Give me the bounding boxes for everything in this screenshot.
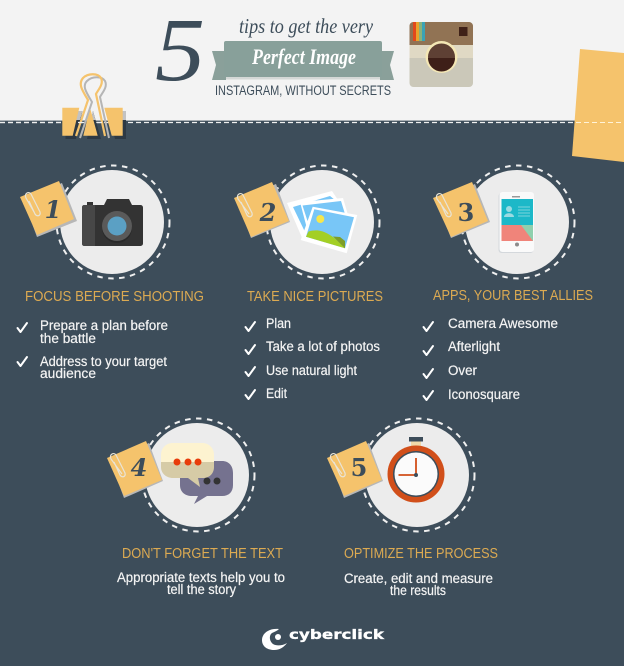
checklist: the battle: [40, 331, 96, 346]
sticky note number 1: 1: [45, 195, 61, 224]
checklist: Camera Awesome: [448, 316, 558, 331]
checklist: Edit: [266, 386, 287, 401]
sticky note number 3: [433, 182, 490, 238]
panel: tip 4: [107, 418, 285, 597]
icon: camera: [82, 199, 143, 246]
ribbon banner: Perfect Image: [251, 44, 356, 69]
icon: photos: [287, 191, 357, 253]
icon: chat bubbles: [161, 443, 233, 504]
title numeral 5: 5: [155, 1, 205, 100]
heading: TAKE NICE PICTURES: [247, 288, 383, 305]
sticky note number 2: 2: [259, 198, 276, 227]
icon circle: [56, 166, 170, 278]
panel: tip 5: [327, 418, 498, 598]
sticky note number 5: 5: [351, 453, 367, 482]
sticky note top right: [572, 49, 624, 162]
description: Appropriate texts help you to: [117, 570, 285, 585]
icon: stopwatch: [388, 437, 444, 502]
checklist: Over: [448, 363, 477, 378]
logo: cyberclick: cyberclick: [289, 628, 384, 643]
checklist: Use natural light: [266, 363, 357, 378]
subtitle: INSTAGRAM, WITHOUT SECRETS: [215, 83, 391, 98]
icon circle: [142, 418, 254, 532]
checklist: Address to your target: [40, 354, 167, 369]
description: the results: [390, 583, 446, 598]
sticky note number 5: [327, 441, 383, 498]
checklist: Take a lot of photos: [266, 339, 380, 354]
sticky note number 4: 4: [131, 453, 147, 482]
checklist: Plan: [266, 316, 291, 331]
heading: DON'T FORGET THE TEXT: [122, 545, 283, 562]
icon circle: [462, 166, 574, 278]
sticky note number 4: [107, 441, 163, 498]
description: [117, 570, 285, 597]
heading: APPS, YOUR BEST ALLIES: [433, 287, 593, 304]
panel: tip 1: [18, 166, 204, 381]
checklist: Iconosquare: [448, 387, 520, 402]
icon circle: [266, 166, 380, 278]
icon: binder clip: [0, 74, 126, 139]
panel: tip 3: [424, 166, 593, 402]
checklist: audience: [40, 366, 96, 381]
title: [155, 1, 394, 100]
heading: OPTIMIZE THE PROCESS: [344, 545, 498, 562]
sticky note number 2: [234, 182, 290, 238]
checklist: [424, 316, 558, 402]
heading: FOCUS BEFORE SHOOTING: [25, 288, 204, 305]
checklist: Prepare a plan before: [40, 318, 168, 333]
description: [344, 571, 493, 598]
panel: tip 2: [234, 166, 383, 401]
checklist: Afterlight: [448, 339, 500, 354]
title line: tips: tips to get the very: [239, 14, 374, 38]
header band: [0, 0, 624, 122]
sticky note number 3: 3: [458, 198, 474, 227]
ribbon banner: [212, 41, 394, 80]
icon: instagram: [410, 22, 473, 87]
checklist: [246, 316, 380, 401]
icon circle: [362, 418, 474, 532]
description: Create, edit and measure: [344, 571, 493, 586]
logo: cyberclick: [262, 628, 384, 650]
description: tell the story: [167, 582, 236, 597]
checklist: [18, 318, 168, 381]
sticky note number 1: [20, 181, 77, 237]
icon: phone: [498, 192, 534, 253]
